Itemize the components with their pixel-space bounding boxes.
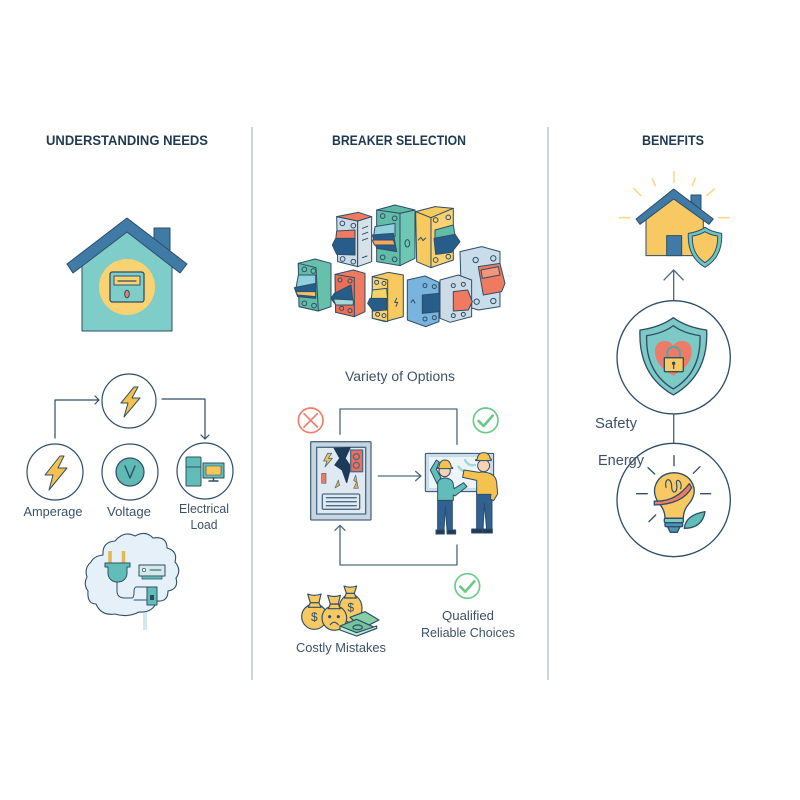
panel: breaker selection bbox=[294, 133, 515, 655]
breaker: red bbox=[331, 270, 365, 317]
icon: green check bbox=[455, 574, 480, 598]
label: qualified reliable choices bbox=[421, 608, 515, 640]
icon: faulty electrical panel bbox=[311, 442, 371, 520]
heading: breaker selection: BREAKER SELECTION bbox=[332, 133, 466, 148]
icon: money bag left: $ bbox=[311, 610, 318, 624]
arrow: safety to protected home bbox=[664, 270, 684, 301]
icon: red cross bbox=[298, 408, 323, 433]
breaker: lower blue bbox=[407, 276, 443, 327]
label: variety of options: Variety of Options bbox=[345, 369, 455, 384]
panel: benefits bbox=[595, 133, 730, 557]
icon: money bag right: $ bbox=[347, 601, 354, 615]
loop line: bottom bbox=[335, 525, 457, 565]
breaker: lower yellow bbox=[368, 272, 403, 322]
breaker: top green bbox=[372, 205, 415, 266]
item: electrical load bbox=[177, 443, 233, 532]
item: electrical load: Electrical bbox=[179, 501, 229, 516]
illustration: selection flow bbox=[298, 408, 498, 565]
icon: cash stack bbox=[340, 612, 379, 636]
icon: cloud of connected appliances bbox=[85, 533, 179, 630]
loop line: top bbox=[340, 409, 457, 444]
item: amperage bbox=[24, 444, 83, 519]
arrow: panel to technicians bbox=[378, 471, 421, 481]
label: costly mistakes: Costly Mistakes bbox=[296, 640, 386, 655]
label: energy: Energy bbox=[598, 452, 644, 469]
breaker: top grey with orange bbox=[332, 212, 372, 267]
panel: understanding needs bbox=[24, 133, 233, 630]
connector: safety to energy bbox=[673, 414, 675, 444]
label: safety: Safety bbox=[595, 415, 637, 432]
item: voltage: Voltage bbox=[107, 504, 151, 519]
icon: house with electrical panel bbox=[67, 218, 187, 331]
label: qualified reliable choices: Reliable Choices bbox=[421, 625, 515, 640]
heading: understanding needs: UNDERSTANDING NEEDS bbox=[46, 133, 208, 148]
illustration: costly mistakes money bags bbox=[302, 574, 480, 636]
label: qualified reliable choices: Qualified bbox=[442, 608, 494, 623]
illustration: assorted circuit breakers bbox=[294, 205, 505, 327]
icon: money bag left bbox=[302, 594, 327, 629]
item: electrical load: Load bbox=[190, 517, 218, 532]
heading: benefits: BENEFITS bbox=[642, 133, 704, 148]
breaker: lower green bbox=[294, 259, 331, 311]
item: voltage bbox=[102, 444, 158, 519]
flow arrow: power to electrical load bbox=[162, 399, 209, 439]
illustration: two technicians at screen bbox=[425, 453, 498, 534]
breaker: lower grey bbox=[440, 275, 472, 322]
breaker: large pale blue bbox=[460, 247, 505, 310]
icon: protected home with rays bbox=[619, 172, 729, 267]
breaker: top yellow bbox=[416, 207, 460, 268]
flow arrow: amperage to power bbox=[55, 396, 99, 438]
icon: money bag right bbox=[339, 586, 362, 622]
item: amperage: Amperage bbox=[24, 504, 82, 519]
icon: green check bbox=[473, 408, 498, 433]
icon: sad money bag bbox=[322, 595, 347, 630]
icon: energy bulb circle bbox=[617, 443, 730, 557]
icon: central lightning circle bbox=[102, 374, 156, 428]
icon: safety shield circle bbox=[617, 301, 730, 414]
